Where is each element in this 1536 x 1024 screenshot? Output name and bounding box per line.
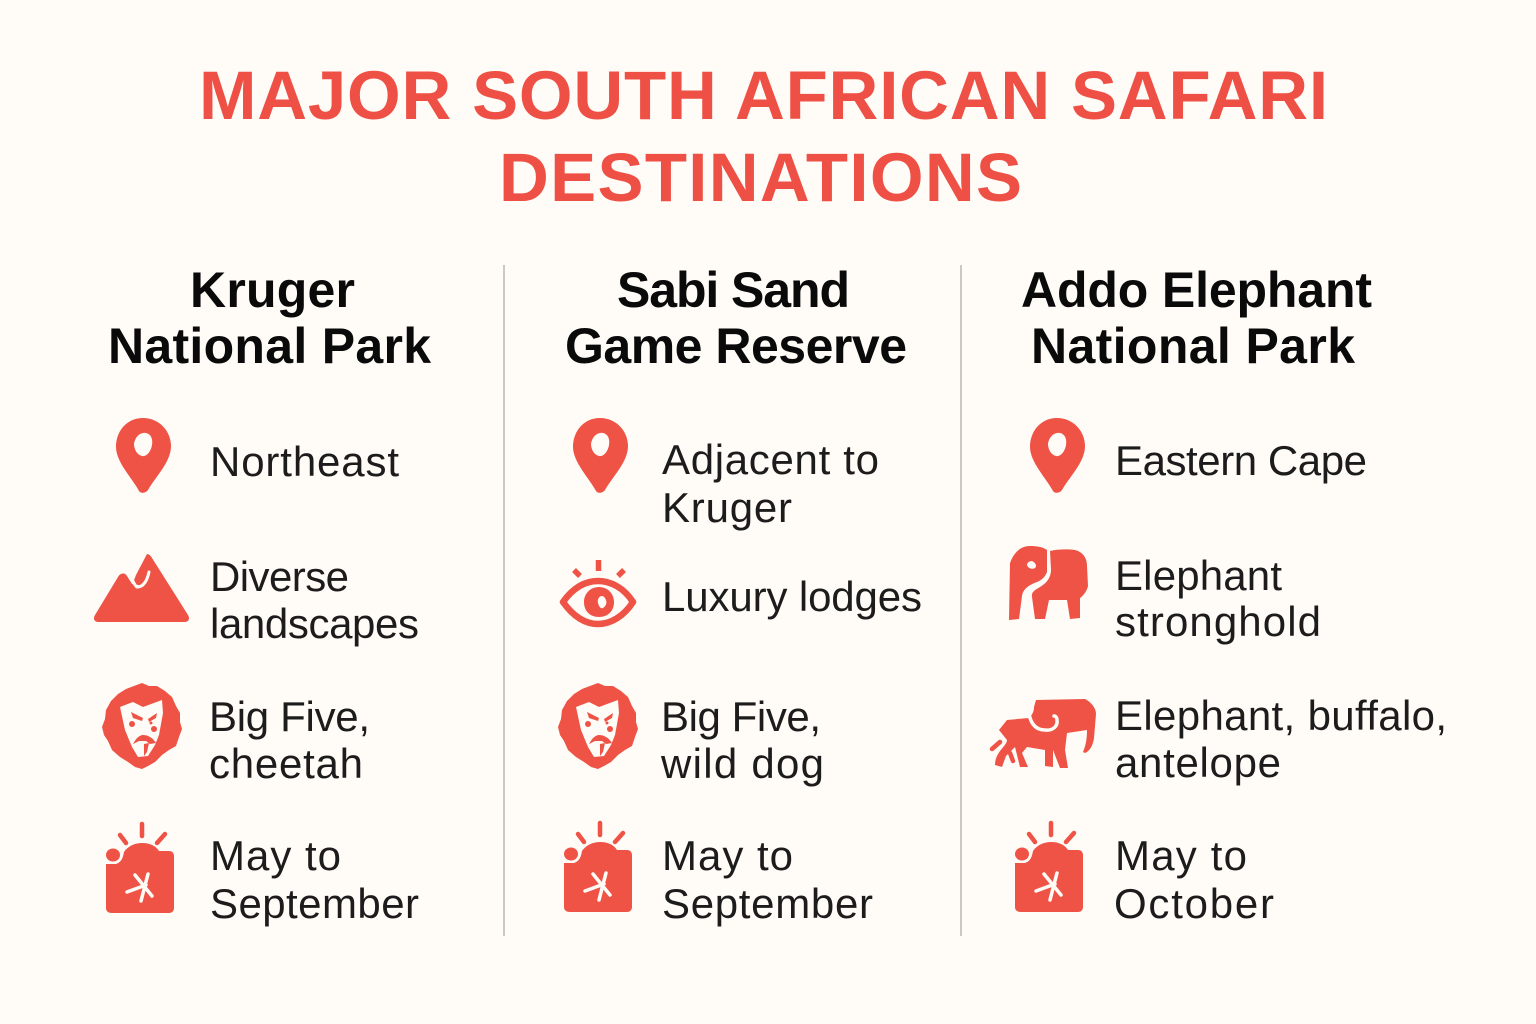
icon: mountain — [94, 554, 189, 622]
icon: elephant front — [1009, 546, 1088, 620]
icon: lion face — [558, 683, 638, 769]
text: best season: October — [1114, 880, 1274, 927]
text: location: Adjacent to — [662, 436, 879, 483]
text: lodging: Luxury lodges — [662, 573, 922, 620]
text: best season — [210, 832, 419, 927]
text: best season — [1114, 832, 1274, 927]
text: terrain — [210, 553, 419, 647]
icon: location pin — [116, 418, 171, 493]
panel: Kruger National Park — [94, 262, 431, 927]
text: location — [662, 436, 879, 531]
icon: calendar sun — [1015, 823, 1083, 912]
heading: Addo Elephant National Park: National Park — [1031, 318, 1355, 374]
heading: Addo Elephant National Park — [1021, 262, 1372, 374]
icon: location pin — [1030, 418, 1085, 493]
title — [199, 57, 1328, 216]
heading: Sabi Sand Game Reserve: Sabi Sand — [617, 262, 850, 318]
heading: Kruger National Park — [108, 262, 431, 374]
icon: calendar sun — [564, 823, 632, 912]
panel: Addo Elephant National Park — [992, 262, 1447, 927]
text: location: Northeast — [210, 438, 399, 485]
title: DESTINATIONS — [499, 139, 1022, 216]
icon: location pin — [573, 418, 628, 493]
text: wildlife — [209, 693, 370, 787]
icon: eye — [563, 560, 633, 624]
text: terrain: landscapes — [210, 600, 419, 647]
text: best season: May to — [662, 832, 793, 879]
text: wildlife: Big Five, — [661, 693, 821, 740]
text: best season: September — [662, 880, 873, 927]
text: best season — [662, 832, 873, 927]
text: wildlife — [1115, 692, 1447, 786]
title: MAJOR SOUTH AFRICAN SAFARI — [199, 57, 1328, 134]
icon: lion face — [102, 683, 182, 769]
text: best season: May to — [1115, 832, 1247, 879]
panel: Sabi Sand Game Reserve — [558, 262, 922, 927]
icon: elephant side — [992, 699, 1096, 768]
text: location: Eastern Cape — [1115, 437, 1367, 484]
text: best season: May to — [210, 832, 341, 879]
text: wildlife: Big Five, — [209, 693, 370, 740]
text: specialty: stronghold — [1115, 598, 1321, 645]
heading: Addo Elephant National Park: Addo Elephant — [1021, 262, 1372, 318]
heading: Kruger National Park: National Park — [108, 318, 431, 374]
text: wildlife: wild dog — [660, 740, 824, 787]
heading: Kruger National Park: Kruger — [190, 262, 355, 318]
text: wildlife: antelope — [1115, 739, 1281, 786]
text: best season: September — [210, 880, 419, 927]
text: wildlife: Elephant, buffalo, — [1115, 692, 1447, 739]
heading: Sabi Sand Game Reserve — [565, 262, 907, 374]
text: specialty — [1115, 552, 1321, 645]
heading: Sabi Sand Game Reserve: Game Reserve — [565, 318, 907, 374]
text: wildlife: cheetah — [209, 740, 363, 787]
icon: calendar sun — [106, 824, 174, 913]
text: terrain: Diverse — [210, 553, 349, 600]
text: location: Kruger — [662, 484, 792, 531]
text: wildlife — [660, 693, 824, 787]
text: specialty: Elephant — [1115, 552, 1282, 599]
